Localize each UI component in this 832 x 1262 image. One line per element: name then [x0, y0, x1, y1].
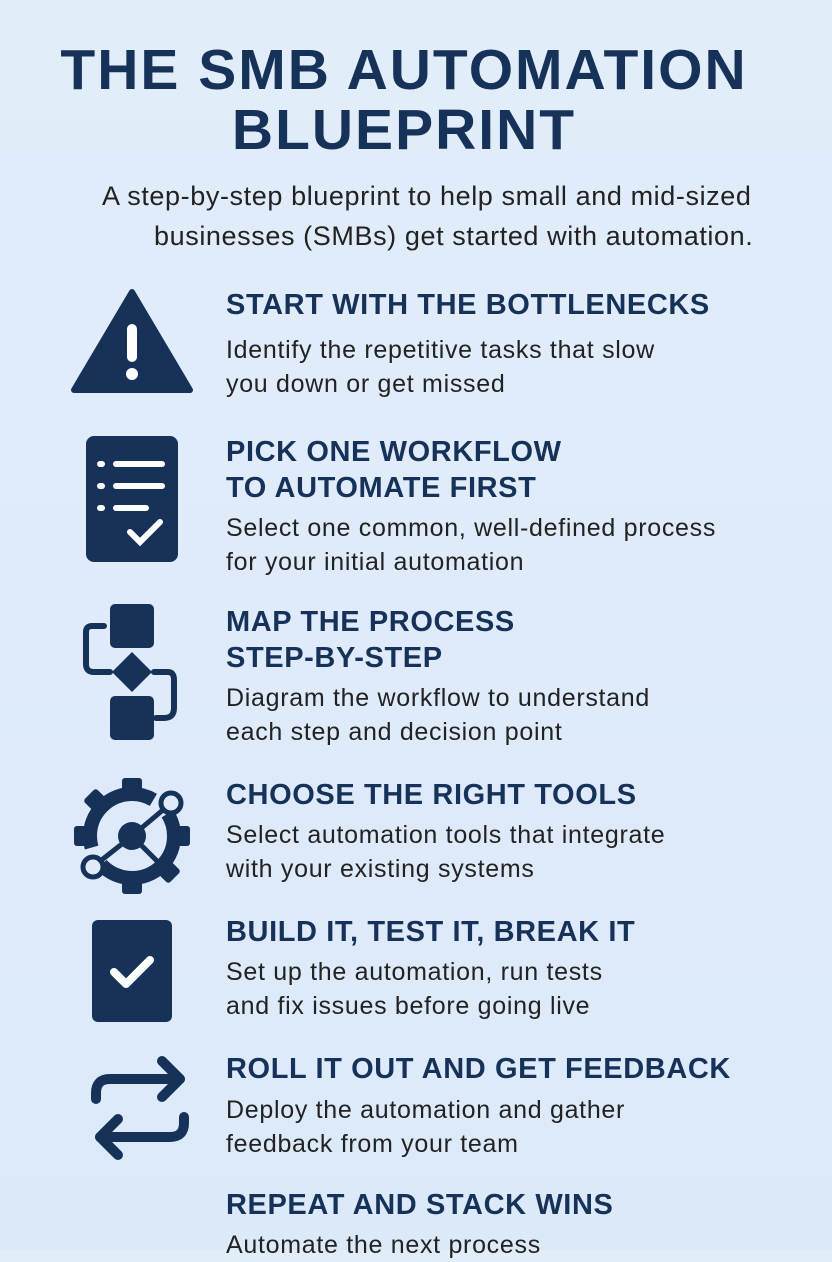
text: with your existing systems: [226, 855, 535, 883]
text: you down or get missed: [226, 370, 505, 398]
text: TO AUTOMATE FIRST: [226, 472, 536, 504]
text: REPEAT AND STACK WINS: [226, 1189, 613, 1221]
text: BUILD IT, TEST IT, BREAK IT: [226, 916, 635, 948]
text: STEP-BY-STEP: [226, 642, 443, 674]
text: Select automation tools that integrate: [226, 821, 665, 849]
step 4: [226, 779, 665, 883]
text: Select one common, well-defined process: [226, 514, 716, 542]
step 6: [226, 1053, 731, 1158]
icon: warning: [71, 289, 193, 393]
icon: cycle arrows: [91, 1056, 189, 1160]
text: Automate the next process: [226, 1231, 541, 1259]
step 7: [226, 1189, 613, 1259]
text: ROLL IT OUT AND GET FEEDBACK: [226, 1053, 731, 1085]
text: PICK ONE WORKFLOW: [226, 436, 562, 468]
text: for your initial automation: [226, 548, 524, 576]
icon: check box: [92, 920, 172, 1022]
subtitle: businesses (SMBs) get started with automation.: [154, 221, 753, 251]
text: Deploy the automation and gather: [226, 1096, 625, 1124]
text: Identify the repetitive tasks that slow: [226, 336, 655, 364]
subtitle: A step-by-step blueprint to help small and mid-sized: [102, 181, 752, 211]
text: Diagram the workflow to understand: [226, 684, 650, 712]
text: feedback from your team: [226, 1130, 519, 1158]
step 5: [226, 916, 635, 1020]
text: MAP THE PROCESS: [226, 606, 515, 638]
icon: checklist document: [86, 436, 178, 562]
text: CHOOSE THE RIGHT TOOLS: [226, 779, 637, 811]
step 3: [226, 606, 650, 746]
title: BLUEPRINT: [232, 98, 576, 162]
title: [60, 38, 748, 162]
text: each step and decision point: [226, 718, 562, 746]
text: Set up the automation, run tests: [226, 958, 603, 986]
step 1: [226, 289, 710, 398]
subtitle: [102, 181, 753, 251]
icon: flowchart: [83, 604, 177, 740]
text: START WITH THE BOTTLENECKS: [226, 289, 710, 321]
step 2: [226, 436, 716, 576]
text: and fix issues before going live: [226, 992, 590, 1020]
icon: gear network: [74, 778, 190, 894]
title: THE SMB AUTOMATION: [60, 38, 748, 102]
